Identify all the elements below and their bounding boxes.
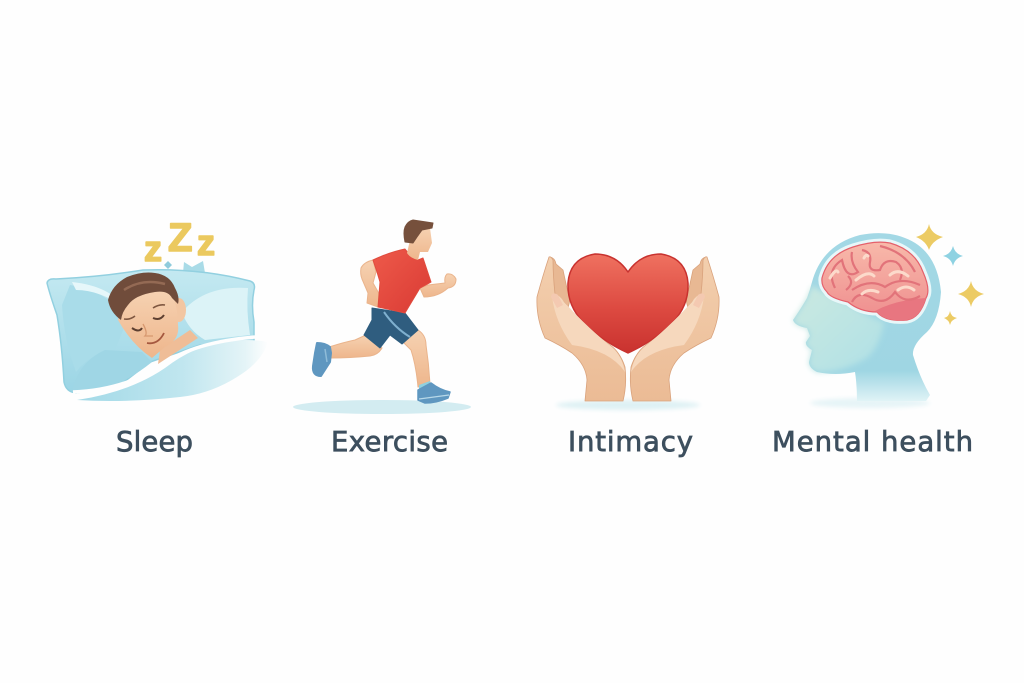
icon: zzz letters (144, 216, 215, 269)
label: Mental health: Mental health (772, 426, 973, 458)
runner shorts (364, 308, 418, 348)
label: Exercise: Exercise (331, 426, 448, 458)
blanket (73, 337, 268, 401)
icon: zzz letters: Z (168, 216, 192, 260)
icon: sleep (47, 216, 268, 401)
heart (568, 254, 688, 353)
icon: heart in hands (537, 254, 719, 410)
sleeping man (108, 272, 198, 364)
icon: zzz letters: z (197, 222, 215, 263)
label: Intimacy: Intimacy (568, 426, 693, 458)
ground shadow (810, 398, 930, 408)
pillow (47, 261, 254, 393)
icon: zzz letters: z (144, 228, 162, 269)
runner back leg (313, 335, 382, 376)
sparkles (916, 224, 984, 325)
brain (822, 242, 928, 320)
runner front leg (403, 330, 450, 403)
runner back arm (361, 260, 381, 307)
left hand (537, 257, 626, 401)
runner front arm (420, 274, 456, 297)
ground shadow (556, 400, 700, 410)
label: Sleep: Sleep (116, 426, 193, 458)
head silhouette (793, 233, 941, 401)
right hand back fingers (686, 257, 713, 320)
ground shadow (293, 400, 471, 414)
right hand (630, 257, 719, 401)
icon: runner (293, 220, 471, 414)
runner shirt (373, 249, 431, 313)
left hand back fingers (543, 257, 570, 320)
runner head (404, 220, 433, 260)
face highlight (793, 286, 884, 372)
icon: head with brain (793, 224, 984, 408)
